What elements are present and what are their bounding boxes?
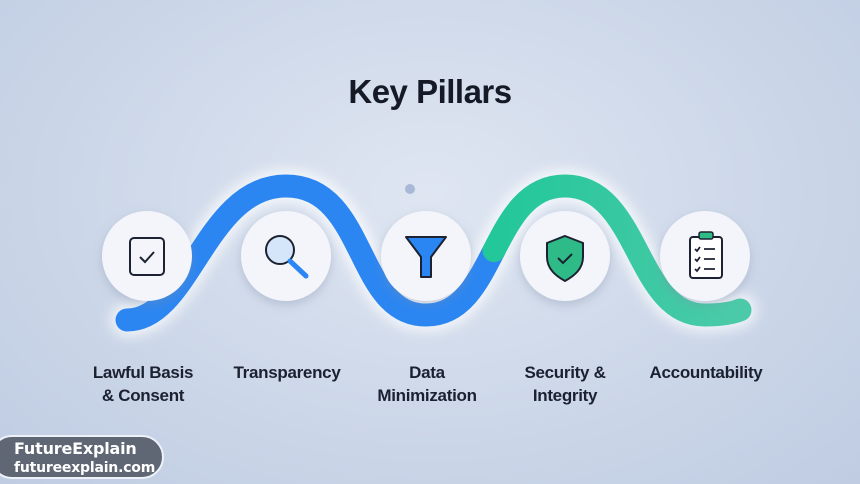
icon circle: funnel	[381, 211, 471, 301]
logo badge: FutureExplain	[14, 439, 137, 458]
label 4: Integrity	[533, 386, 597, 405]
wave: blue segment	[127, 186, 494, 320]
decorative dot	[405, 184, 415, 194]
icon circle: shield	[520, 211, 610, 301]
label 5: Accountability	[650, 363, 762, 382]
label 1: & Consent	[102, 386, 184, 405]
title: Key Pillars	[348, 73, 512, 110]
label 3: Minimization	[377, 386, 477, 405]
label 2: Transparency	[234, 363, 340, 382]
label 1: Lawful Basis	[93, 363, 193, 382]
label 1	[93, 363, 193, 405]
icon circle: magnifier	[241, 211, 331, 301]
logo badge	[0, 435, 164, 479]
label 3	[377, 363, 477, 405]
label 4	[524, 363, 606, 405]
logo badge: futureexplain.com	[14, 460, 155, 476]
icon circle: clipboard	[660, 211, 750, 301]
label 4: Security &	[524, 363, 606, 382]
wave: green segment	[494, 186, 740, 315]
icon circle: checkbox	[102, 211, 192, 301]
label 3: Data	[409, 363, 445, 382]
wave glow	[127, 186, 740, 320]
